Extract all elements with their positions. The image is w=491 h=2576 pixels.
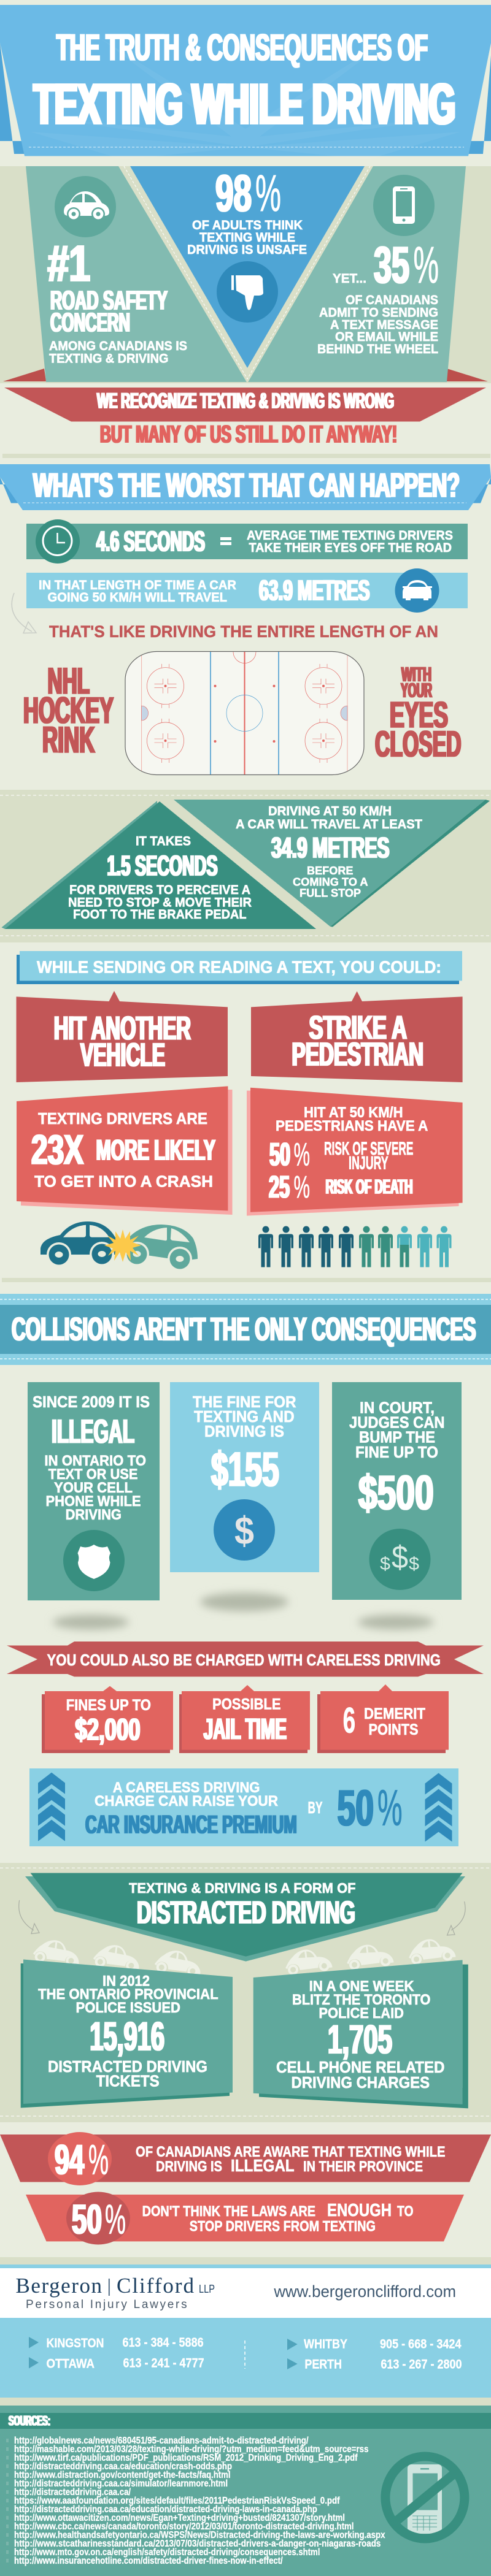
panel: 1,705 charges: CELL PHONE RELATED <box>276 2058 444 2076</box>
text: canadians admit <box>317 292 438 356</box>
box: fines up to 2000: $2,000 <box>75 1712 141 1746</box>
panel: insurance premium: % <box>377 1779 403 1836</box>
stat band: 50 percent: % <box>105 2196 126 2243</box>
card: fine up to 500: BUMP THE <box>359 1428 435 1447</box>
list of source links: http://distracteddriving.caa.ca/education/distracted-driving-laws-in-canada.php <box>14 2504 317 2515</box>
panel: office phone numbers: PERTH <box>304 2357 342 2372</box>
icon: chevrons right <box>425 1773 452 1842</box>
heading: while sending or reading <box>17 951 462 984</box>
text: 34.9 metres: A CAR WILL TRAVEL AT LEAST <box>236 817 422 831</box>
list of source links: http://www.tirf.ca/publications/PDF_publications/RSM_2012_Drinking_Driving_Eng_2.pdf <box>14 2453 358 2463</box>
icon: dollars: $ <box>392 1540 408 1575</box>
text: NHL hockey rink: RINK <box>42 719 95 760</box>
35 percent <box>333 236 439 294</box>
card shadows <box>53 1593 434 1630</box>
stat band: 94 percent: % <box>88 2136 109 2183</box>
panel: stopping distance <box>0 790 491 942</box>
text: canadians admit: ADMIT TO SENDING <box>319 305 438 320</box>
bar: 63.9 metres: GOING 50 KM/H WILL TRAVEL <box>48 590 227 605</box>
icon: chevrons left <box>38 1773 65 1841</box>
list of source links: http://mashable.com/2013/03/28/texting-while-driving/?utm_medium=feed&utm_source=rss <box>14 2444 368 2455</box>
list of source links: http://distracteddriving.caa.ca/ <box>14 2487 131 2498</box>
box: demerit points <box>317 1684 449 1753</box>
panel: pedestrian risk: RISK OF DEATH <box>326 1175 412 1198</box>
panel: sources <box>0 2406 491 2576</box>
text: number one concern: #1 <box>48 235 90 292</box>
panel: 15,916 tickets: DISTRACTED DRIVING <box>48 2057 207 2076</box>
chart: hockey rink <box>125 651 364 775</box>
icon: clock <box>36 519 80 564</box>
panel: law firm logo: Clifford <box>117 2274 194 2298</box>
text: 34.9 metres: FULL STOP <box>300 887 361 899</box>
panel: law firm logo: Personal Injury Lawyers <box>26 2298 187 2311</box>
box: demerit points: 6 <box>343 1701 355 1740</box>
text: with your eyes closed: WITH <box>401 663 431 686</box>
card: fine 155: TEXTING AND <box>194 1407 295 1426</box>
list of source links: http://distracteddriving.caa.ca/education/crash-odds.php <box>14 2461 232 2472</box>
panel: 1,705 charges: DRIVING CHARGES <box>291 2073 430 2092</box>
arrow: left <box>19 1900 39 1934</box>
stat band: 94 percent: DRIVING IS <box>156 2158 222 2175</box>
text: number one concern: ROAD SAFETY <box>50 286 168 315</box>
panel: office phone numbers: KINGSTON <box>47 2336 104 2350</box>
text: 1.5 seconds: FOR DRIVERS TO PERCEIVE A <box>69 882 250 897</box>
panel: law firm logo: LLP <box>199 2283 215 2295</box>
heading: form of distracted driving <box>129 1880 356 1930</box>
card: fine up to 500: FINE UP TO <box>355 1443 438 1461</box>
stat band: 50 percent: ENOUGH <box>327 2201 392 2220</box>
banner: we recognize <box>4 388 486 422</box>
title <box>34 27 455 136</box>
text: number one concern <box>48 235 187 365</box>
35 percent: % <box>414 236 439 294</box>
panel: pedestrian risk: 50 <box>269 1137 290 1172</box>
list of source links: http://distracteddriving.caa.ca/simulator/learnmore.html <box>14 2479 228 2489</box>
text: number one concern: TEXTING & DRIVING <box>49 351 168 365</box>
panel: office phone numbers: 613 - 267 - 2800 <box>381 2357 462 2372</box>
list of source links: http://www.stcatharinesstandard.ca/2013/07/03/distracted-drivers-a-danger-on-niagaras-roads <box>14 2539 381 2549</box>
stat band: 50 percent: 50 <box>72 2196 102 2243</box>
card: illegal: DRIVING <box>66 1507 122 1523</box>
panel: 1,705 charges <box>253 1960 468 2108</box>
box: possible jail time: POSSIBLE <box>212 1696 281 1713</box>
card: illegal: SINCE 2009 IT IS <box>33 1393 150 1411</box>
text: NHL hockey rink: HOCKEY <box>23 690 114 731</box>
stat band: 94 percent <box>0 2132 491 2185</box>
icon: smartphone <box>373 175 435 236</box>
ribbon: careless driving <box>7 1642 484 1676</box>
panel: 15,916 tickets <box>21 1960 233 2108</box>
panel: hit another vehicle: VEHICLE <box>80 1036 165 1073</box>
text: 1.5 seconds: FOOT TO THE BRAKE PEDAL <box>73 907 247 922</box>
list of source links: http://www.mto.gov.on.ca/english/safety/distracted-driving/consequences.shtml <box>14 2547 320 2558</box>
heading: form of distracted driving: TEXTING & DRIVING IS A FORM OF <box>129 1880 356 1896</box>
list of source links: http://www.cbc.ca/news/canada/toronto/story/2012/03/01/toronto-distracted-driving.html <box>14 2521 354 2532</box>
card: illegal: IN ONTARIO TO <box>44 1453 146 1469</box>
text: canadians admit: OR EMAIL WHILE <box>335 329 438 344</box>
list of source links: http://www.healthandsafetyontario.ca/WSPS/News/Distracted-driving-the-laws-are-working.aspx <box>14 2530 385 2540</box>
chart: pictogram of ten people <box>258 1226 452 1267</box>
box: demerit points: DEMERIT <box>364 1705 425 1722</box>
panel: hit another vehicle: HIT ANOTHER <box>54 1010 191 1047</box>
panel: pedestrian risk: % <box>293 1137 310 1172</box>
panel: insurance premium <box>29 1768 458 1846</box>
panel: 15,916 tickets: 15,916 <box>90 2014 164 2059</box>
icon: car <box>55 176 116 237</box>
panel: office phone numbers: 905 - 668 - 3424 <box>380 2337 462 2351</box>
icon: row of cars left <box>33 1938 203 1976</box>
panel: pedestrian risk: INJURY <box>349 1153 389 1174</box>
arrow: curved grey <box>12 593 36 633</box>
text: canadians admit: A TEXT MESSAGE <box>330 318 438 332</box>
icon: thumbs down <box>217 261 278 323</box>
text: canadians admit: OF CANADIANS <box>346 292 438 307</box>
bar: 63.9 metres: 63.9 METRES <box>259 574 369 606</box>
35 percent: YET... <box>333 272 366 286</box>
panel: 15,916 tickets: THE ONTARIO PROVINCIAL <box>38 1986 218 2003</box>
icon: dollars: $ <box>409 1554 419 1574</box>
text: NHL hockey rink: NHL <box>48 660 90 701</box>
panel: 1,705 charges: BLITZ THE TORONTO <box>292 1992 431 2008</box>
icon: dollar <box>214 1499 275 1561</box>
stat band: 50 percent: STOP DRIVERS FROM TEXTING <box>190 2219 376 2234</box>
text: 34.9 metres: 34.9 METRES <box>271 831 389 863</box>
text: 34.9 metres: BEFORE <box>307 864 354 877</box>
card: illegal <box>28 1382 160 1600</box>
box: fines up to 2000 <box>42 1686 173 1753</box>
text: 1.5 seconds: NEED TO STOP & MOVE THEIR <box>68 895 252 910</box>
bar: 4.6 seconds: TAKE THEIR EYES OFF THE ROAD <box>249 540 452 555</box>
panel: 23x more likely: TEXTING DRIVERS ARE <box>38 1109 207 1128</box>
list of source links <box>14 2436 385 2566</box>
panel: 15,916 tickets: POLICE ISSUED <box>76 2000 180 2016</box>
arrow: right <box>447 1901 465 1935</box>
card: fine 155: DRIVING IS <box>204 1422 284 1440</box>
list of source links: http://www.distraction.gov/content/get-the-facts/faq.html <box>14 2470 231 2480</box>
panel: office phone numbers: 613 - 241 - 4777 <box>123 2356 204 2371</box>
bar: 4.6 seconds: 4.6 SECONDS <box>96 525 205 557</box>
card: fine up to 500: JUDGES CAN <box>349 1413 444 1431</box>
icon: crashing cars <box>41 1221 198 1271</box>
panel: office phone numbers: WHITBY <box>304 2337 347 2351</box>
panel: 23x more likely: 23X <box>31 1126 83 1173</box>
card: fine 155: THE FINE FOR <box>193 1393 296 1411</box>
icon: dollar: $ <box>234 1508 254 1553</box>
icon: car front <box>395 568 439 613</box>
stat band: 50 percent: DON'T THINK THE LAWS ARE <box>142 2203 315 2220</box>
text: adults think unsafe: DRIVING IS UNSAFE <box>187 242 307 257</box>
stat band: 94 percent: ILLEGAL <box>231 2156 295 2175</box>
stat band: 94 percent: IN THEIR PROVINCE <box>303 2158 423 2175</box>
stat band: 50 percent: TO <box>397 2203 414 2220</box>
text: with your eyes closed <box>375 663 462 764</box>
card: fine up to 500: $500 <box>358 1465 434 1519</box>
text: 34.9 metres <box>236 805 422 899</box>
panel: office phone numbers: OTTAWA <box>47 2357 95 2371</box>
panel: law firm logo: Bergeron <box>16 2274 102 2298</box>
panel: insurance premium: BY <box>308 1798 323 1817</box>
panel: 15,916 tickets: IN 2012 <box>102 1973 150 1989</box>
icon: row of cars right <box>284 1936 456 1974</box>
card: fine up to 500 <box>332 1382 462 1600</box>
panel: statistics <box>0 164 491 383</box>
text: 1.5 seconds: 1.5 SECONDS <box>107 850 217 882</box>
panel: 1,705 charges: 1,705 <box>328 2016 392 2062</box>
bar: 4.6 seconds <box>26 519 468 564</box>
heading: while sending or reading: WHILE SENDING OR READING A TEXT, YOU COULD: <box>37 958 441 976</box>
panel: strike a pedestrian: STRIKE A <box>309 1009 407 1046</box>
panel: law firm logo <box>0 2268 491 2318</box>
text: canadians admit: BEHIND THE WHEEL <box>317 342 438 356</box>
icon: police badge <box>63 1530 125 1591</box>
card: illegal: YOUR CELL <box>54 1480 133 1496</box>
text: 1.5 seconds <box>68 834 252 922</box>
section banner: collisions <box>0 1294 491 1365</box>
panel: pedestrian risk: HIT AT 50 KM/H <box>304 1104 403 1121</box>
card: fine 155: $155 <box>211 1442 279 1496</box>
card: fine 155 <box>170 1382 319 1572</box>
text: with your eyes closed: YOUR <box>401 679 432 701</box>
panel: 23x more likely <box>17 1086 232 1215</box>
bar: 63.9 metres: IN THAT LENGTH OF TIME A CAR <box>39 578 236 592</box>
card: fine up to 500: IN COURT, <box>360 1398 435 1416</box>
stat band: 50 percent <box>26 2192 464 2244</box>
list of source links: http://globalnews.ca/news/680451/95-canadians-admit-to-distracted-driving/ <box>14 2436 309 2446</box>
text: 34.9 metres: DRIVING AT 50 KM/H <box>268 805 392 818</box>
panel: insurance premium: A CARELESS DRIVING <box>113 1779 260 1796</box>
panel: law firm logo: www.bergeronclifford.com <box>273 2282 456 2301</box>
panel: pedestrian risk: % <box>293 1169 310 1204</box>
panel: office phone numbers: 613 - 384 - 5886 <box>123 2336 204 2350</box>
card: illegal: PHONE WHILE <box>45 1493 141 1510</box>
list of source links: http://www.insurancehotline.com/distracted-driver-fines-now-in-effect/ <box>14 2556 283 2566</box>
panel: pedestrian risk: 25 <box>269 1169 290 1204</box>
panel: 23x more likely: MORE LIKELY <box>96 1133 215 1166</box>
98 percent: % <box>255 164 281 222</box>
list of source links: http://www.ottawacitizen.com/news/Egan+Texting+driving+busted/8241307/story.html <box>14 2513 345 2523</box>
icon: dollars <box>369 1529 431 1590</box>
heading: entire length: THAT'S LIKE DRIVING THE ENTIRE LENGTH OF AN <box>49 622 438 641</box>
panel: pedestrian risk <box>247 1088 463 1216</box>
stat band: 94 percent: 94 <box>55 2136 84 2183</box>
box: possible jail time: JAIL TIME <box>204 1713 287 1746</box>
icon: dollars: $ <box>380 1554 390 1574</box>
panel: distracted driving <box>0 1863 491 2122</box>
panel: strike a pedestrian <box>251 991 463 1082</box>
panel: 1,705 charges: POLICE LAID <box>319 2005 404 2022</box>
card: illegal: ILLEGAL <box>52 1412 134 1450</box>
heading: sources: SOURCES: <box>9 2412 50 2428</box>
panel: pedestrian risk: RISK OF SEVERE <box>324 1139 414 1159</box>
text: number one concern: CONCERN <box>50 308 130 337</box>
header banner <box>0 5 491 159</box>
text: adults think unsafe: OF ADULTS THINK <box>192 218 303 232</box>
box: demerit points: POINTS <box>368 1721 419 1738</box>
bar: 63.9 metres <box>26 568 468 613</box>
panel: insurance premium: 50 <box>338 1779 374 1836</box>
text: 34.9 metres: COMING TO A <box>293 876 368 888</box>
box: possible jail time <box>179 1685 310 1753</box>
box: fines up to 2000: FINES UP TO <box>66 1697 151 1714</box>
35 percent: 35 <box>374 236 409 294</box>
card: illegal: TEXT OR USE <box>48 1466 137 1483</box>
bar: 4.6 seconds: AVERAGE TIME TEXTING DRIVERS <box>247 528 453 543</box>
panel: insurance premium: CHARGE CAN RAISE YOUR <box>95 1793 278 1810</box>
text: adults think unsafe: TEXTING WHILE <box>199 230 295 245</box>
text: adults think unsafe <box>187 218 307 257</box>
list of source links: https://www.aaafoundation.org/sites/default/files/2011PedestrianRiskVsSpeed_0.pdf <box>14 2496 340 2506</box>
panel: insurance premium: CAR INSURANCE PREMIUM <box>85 1810 297 1838</box>
heading: form of distracted driving: DISTRACTED DRIVING <box>137 1895 355 1930</box>
panel: 23x more likely: TO GET INTO A CRASH <box>34 1172 213 1191</box>
panel: 15,916 tickets: TICKETS <box>96 2072 160 2090</box>
98 percent: 98 <box>215 164 252 222</box>
panel: 1,705 charges: IN A ONE WEEK <box>309 1978 414 1995</box>
text: 1.5 seconds: IT TAKES <box>136 834 191 849</box>
panel: office phone numbers <box>0 2318 491 2398</box>
text: number one concern: AMONG CANADIANS IS <box>49 338 187 353</box>
text: NHL hockey rink <box>23 660 114 760</box>
panel: hit another vehicle <box>16 991 228 1082</box>
icon: no phone <box>385 2456 465 2539</box>
text: with your eyes closed: EYES <box>390 695 448 735</box>
panel: pedestrian risk: PEDESTRIANS HAVE A <box>276 1118 428 1134</box>
